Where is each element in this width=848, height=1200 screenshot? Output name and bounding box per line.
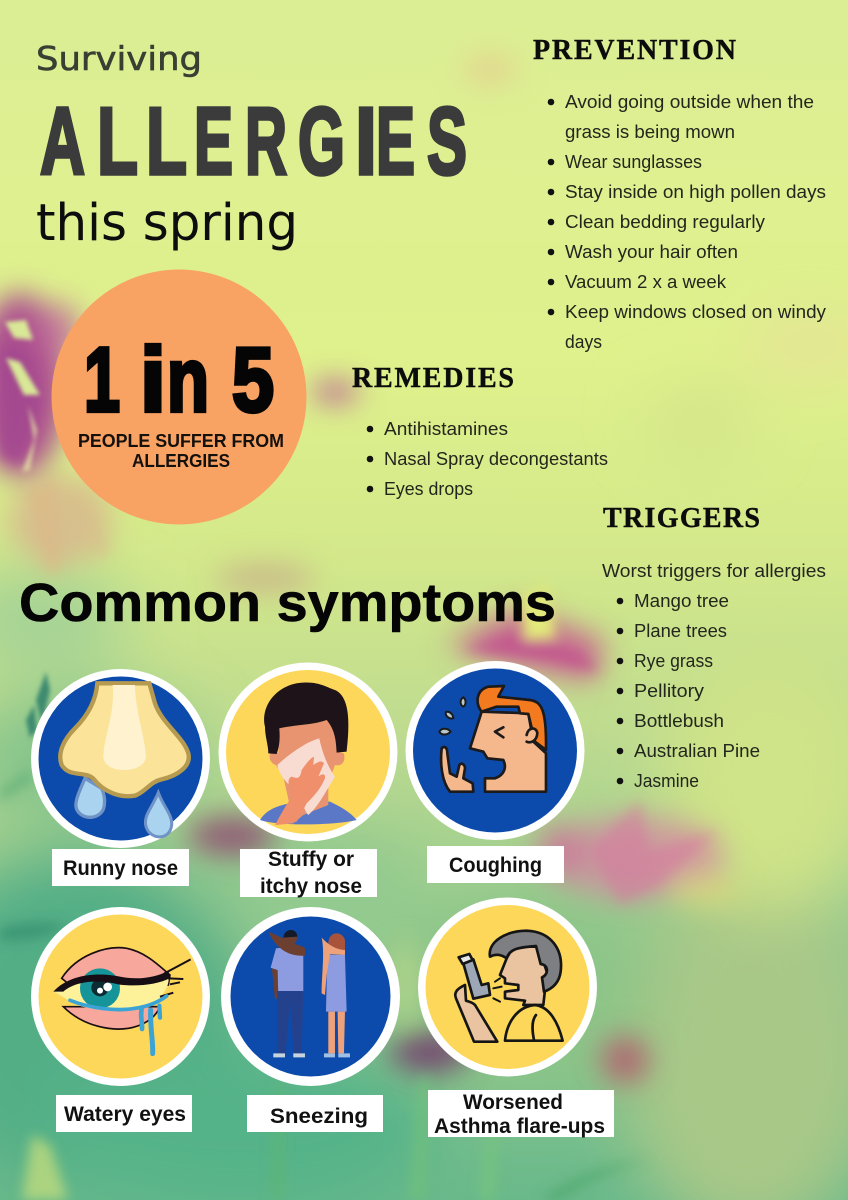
heading: remedies: REMEDIES: [352, 363, 514, 394]
title: E: [194, 88, 233, 195]
label: stuffy or itchy nose: itchy nose: [260, 875, 362, 898]
callout: 1 in 5 circle: ALLERGIES: [132, 450, 230, 471]
list: prevention tips: grass is being mown: [565, 122, 735, 142]
label: sneezing: [247, 1095, 383, 1132]
list: triggers: Mango tree: [634, 591, 729, 611]
list: triggers: Rye grass: [634, 651, 713, 671]
list: prevention tips: Wash your hair often: [565, 242, 738, 262]
label: sneezing: Sneezing: [270, 1105, 368, 1128]
label: watery eyes: Watery eyes: [64, 1103, 186, 1126]
list: prevention tips: Stay inside on high pollen days: [565, 182, 826, 202]
heading: prevention: PREVENTION: [533, 35, 736, 66]
title: R: [245, 88, 287, 195]
title: E: [376, 88, 415, 195]
label: runny nose: [52, 849, 189, 886]
icon: runny nose: [31, 669, 210, 848]
list: remedies: [367, 419, 608, 499]
icon: watery eyes: [31, 907, 210, 1086]
list: triggers: Australian Pine: [634, 741, 760, 761]
list: prevention tips: Wear sunglasses: [565, 152, 702, 172]
icon: stuffy nose: [218, 662, 398, 842]
title: G: [298, 88, 345, 195]
list: triggers: Plane trees: [634, 621, 727, 641]
list: prevention tips: Avoid going outside when the: [565, 92, 814, 112]
heading: common symptoms: Common symptoms: [19, 573, 556, 633]
list: prevention tips: Keep windows closed on windy: [565, 302, 826, 322]
title: S: [427, 88, 467, 195]
callout: 1 in 5 circle: PEOPLE SUFFER FROM: [78, 430, 284, 451]
callout: 1 in 5 circle: n: [167, 330, 209, 431]
label: coughing: [427, 846, 564, 883]
list: triggers: Jasmine: [634, 771, 699, 791]
label: worsened asthma flare-ups: [428, 1090, 614, 1138]
list: prevention tips: days: [565, 332, 602, 352]
list: remedies: Antihistamines: [384, 419, 508, 439]
label: worsened asthma flare-ups: Worsened: [463, 1091, 563, 1114]
title: this spring: [36, 194, 298, 253]
panel: prevention: [533, 35, 826, 352]
icon: coughing: [406, 661, 584, 840]
label: coughing: Coughing: [449, 854, 542, 877]
panel: triggers: [602, 503, 826, 791]
list: prevention tips: [548, 92, 826, 352]
title: [36, 39, 467, 253]
callout: 1 in 5 circle: [52, 270, 306, 524]
list: triggers: Pellitory: [634, 681, 704, 701]
panel: remedies: [352, 363, 608, 499]
text: triggers intro: Worst triggers for allergies: [602, 561, 826, 581]
list: triggers: [617, 591, 760, 791]
list: remedies: Eyes drops: [384, 479, 473, 499]
title: Surviving: [36, 39, 202, 78]
label: runny nose: Runny nose: [63, 857, 178, 880]
list: triggers: Bottlebush: [634, 711, 724, 731]
list: remedies: Nasal Spray decongestants: [384, 449, 608, 469]
icon: asthma inhaler: [418, 898, 597, 1076]
label: stuffy or itchy nose: [240, 848, 377, 898]
list: prevention tips: Vacuum 2 x a week: [565, 272, 727, 292]
list: prevention tips: Clean bedding regularly: [565, 212, 765, 232]
label: watery eyes: [56, 1095, 192, 1132]
title: L: [97, 88, 138, 195]
heading: triggers: TRIGGERS: [603, 503, 760, 534]
callout: 1 in 5 circle: i: [140, 330, 166, 431]
title: A: [40, 88, 85, 195]
title: I: [355, 88, 377, 195]
callout: 1 in 5 circle: 5: [232, 330, 274, 431]
title: L: [146, 88, 187, 195]
icon: sneezing: [221, 907, 400, 1086]
label: stuffy or itchy nose: Stuffy or: [268, 848, 354, 871]
callout: 1 in 5 circle: 1: [84, 330, 120, 431]
label: worsened asthma flare-ups: Asthma flare-ups: [434, 1115, 605, 1138]
